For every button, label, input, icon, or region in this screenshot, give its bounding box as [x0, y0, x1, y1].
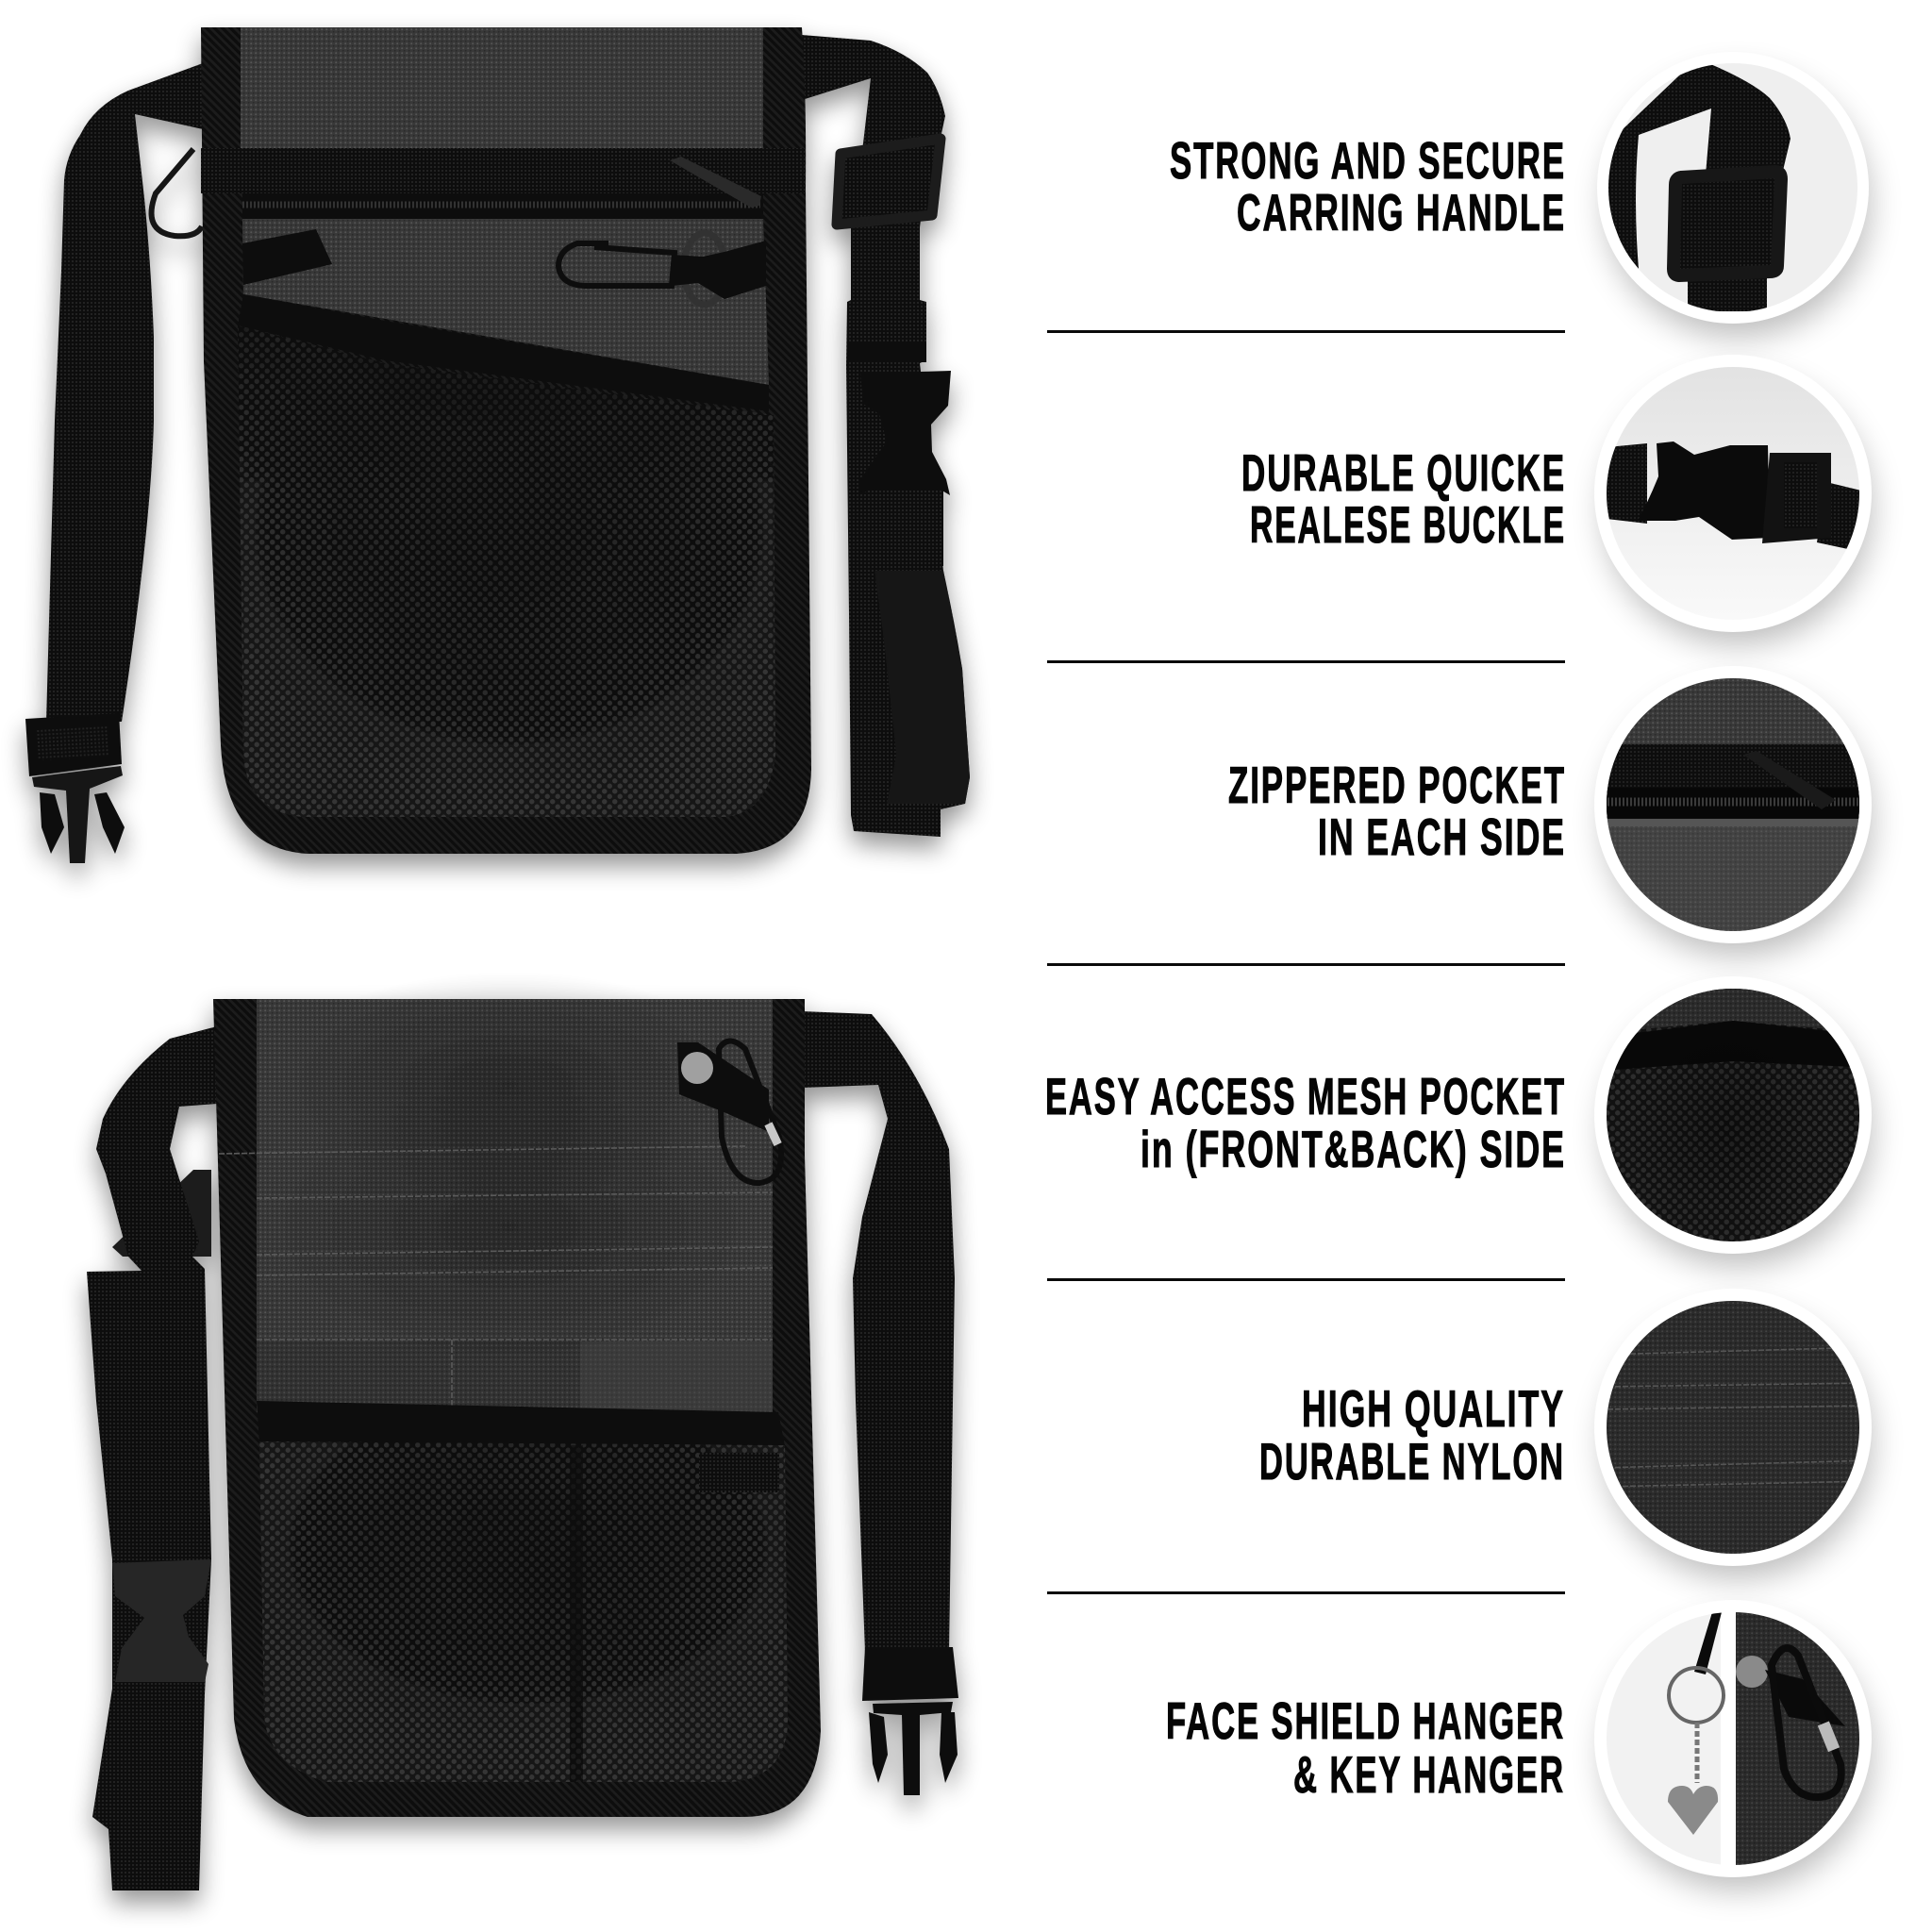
strap fold	[847, 341, 926, 362]
slider behind strap	[112, 1170, 211, 1257]
zipper band	[257, 1401, 785, 1446]
female buckle	[112, 1559, 211, 1682]
slider	[1674, 172, 1781, 275]
loop tab	[242, 229, 332, 285]
feature text: carrying handle: CARRING HANDLE	[1237, 183, 1566, 242]
feature text: nylon: DURABLE NYLON	[1259, 1432, 1565, 1491]
buckle	[1638, 441, 1770, 540]
strap slider	[837, 139, 941, 225]
black stitched band	[201, 148, 805, 193]
feature text: hangers: & KEY HANGER	[1293, 1745, 1565, 1804]
feature text: zipper	[1228, 756, 1566, 866]
ball hook	[1736, 1656, 1768, 1688]
female quick release buckle	[858, 371, 951, 495]
feature text: hangers: FACE SHIELD HANGER	[1166, 1691, 1565, 1750]
feature text: buckle	[1241, 443, 1566, 554]
feature text: buckle: DURABLE QUICKE	[1241, 443, 1566, 502]
key ring strap	[1694, 1612, 1722, 1674]
feature text: mesh pocket: in (FRONT&BACK) SIDE	[1141, 1120, 1566, 1178]
feature text: nylon: HIGH QUALITY	[1302, 1379, 1565, 1438]
right waist strap	[802, 35, 970, 837]
feature text: carrying handle	[1170, 131, 1566, 242]
rule lines	[1047, 330, 1565, 1594]
bag body	[213, 999, 821, 1817]
outer strap band	[1600, 58, 1790, 269]
left male buckle	[25, 713, 125, 863]
folded tail loop	[874, 571, 970, 804]
lower strap	[1688, 278, 1767, 311]
top grey flap	[241, 27, 763, 148]
ball hook and carabiner	[677, 1041, 782, 1183]
upper zipper	[242, 157, 763, 219]
circle: nylon fabric detail	[1594, 1289, 1874, 1578]
pocket tab	[699, 1453, 779, 1492]
feature text: zipper: ZIPPERED POCKET	[1228, 756, 1566, 814]
left carabiner	[151, 149, 202, 236]
circle: mesh pocket detail	[1594, 976, 1874, 1266]
mesh pocket	[259, 1441, 788, 1782]
circle: carrying handle detail	[1597, 52, 1874, 337]
male buckle	[862, 1647, 958, 1795]
feature text: mesh pocket	[1045, 1067, 1566, 1178]
bag body	[201, 27, 811, 854]
left waist strap	[46, 63, 203, 722]
right strap	[802, 1011, 955, 1652]
chain	[1694, 1723, 1700, 1783]
feature text: hangers	[1166, 1691, 1565, 1804]
zipper pull	[1743, 751, 1836, 809]
feature text: zipper: IN EACH SIDE	[1318, 808, 1566, 866]
grey middle panel	[242, 219, 769, 385]
feature text: buckle: REALESE BUCKLE	[1250, 495, 1566, 554]
left strap	[87, 1026, 217, 1890]
key ring	[1669, 1668, 1724, 1723]
mesh pocket	[238, 326, 775, 817]
heart charm	[1668, 1786, 1718, 1835]
diagonal zipper band	[238, 294, 769, 411]
product photo: back view of nurse organizer belt	[87, 972, 958, 1890]
product photo: front view of nurse organizer belt	[25, 27, 970, 863]
feature text: carrying handle: STRONG AND SECURE	[1170, 131, 1566, 190]
grey panel with pen slots	[219, 972, 774, 1412]
circle: quick release buckle detail	[1594, 355, 1874, 644]
carabiner	[1772, 1648, 1841, 1797]
circle: zipper detail	[1594, 666, 1874, 956]
circle: key and face shield hanger detail	[1594, 1600, 1874, 1890]
strap	[1607, 443, 1861, 552]
feature text: mesh pocket: EASY ACCESS MESH POCKET	[1045, 1067, 1566, 1125]
feature text: nylon	[1259, 1379, 1565, 1491]
swivel clip	[558, 233, 766, 305]
